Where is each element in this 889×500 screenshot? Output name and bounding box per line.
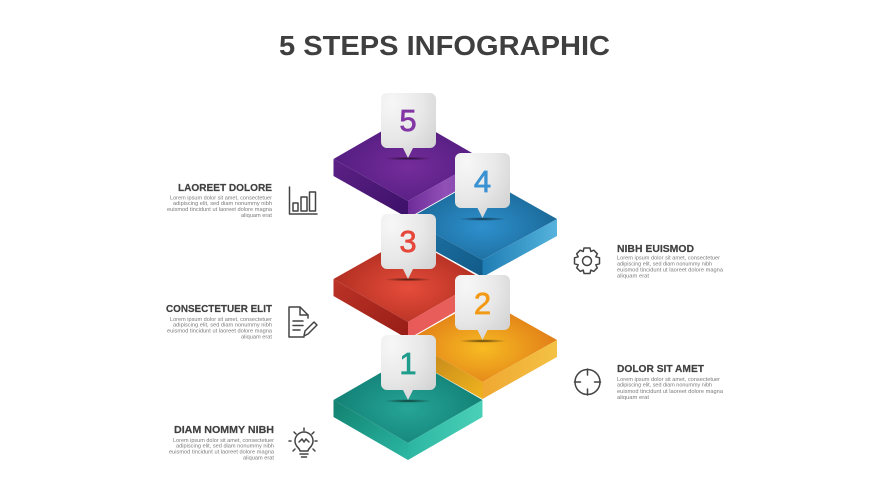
callout 1 [381, 335, 436, 403]
text block: Laoreet Dolore: LAOREET DOLORE [178, 182, 272, 194]
step 2 block: orange [408, 298, 557, 399]
step 3 block: red [334, 237, 482, 339]
callout 5: 5 [399, 103, 417, 138]
step 4 block: blue [408, 177, 557, 277]
text block: Dolor Sit Amet: DOLOR SIT AMET [617, 363, 705, 375]
icon: gear [574, 248, 600, 274]
callout 3: 3 [399, 224, 417, 259]
text block: Laoreet Dolore: adipiscing elit, sed diam nonummy nibh [173, 201, 272, 207]
step 1 block: teal [334, 357, 482, 460]
callout 2: 2 [474, 286, 491, 321]
text block: Consectetuer Elit: CONSECTETUER ELIT [166, 303, 273, 315]
text block: Nibh Euismod: Lorem ipsum dolor sit amet, consectetuer [617, 256, 720, 262]
text block: Nibh Euismod: euismod tincidunt ut laoreet dolore magna [617, 267, 723, 273]
text block: Nibh Euismod [617, 243, 723, 280]
text block: Dolor Sit Amet: Lorem ipsum dolor sit amet, consectetuer [617, 377, 720, 383]
text block: Diam Nommy Nibh: Lorem ipsum dolor sit amet, consectetuer [173, 438, 274, 444]
callout 3 [381, 214, 436, 281]
text block: Consectetuer Elit: euismod tincidunt ut laoreet dolore magna [167, 328, 272, 334]
text block: Diam Nommy Nibh: euismod tincidunt ut laoreet dolore magna [169, 449, 274, 455]
text block: Dolor Sit Amet: adipiscing elit, sed diam nonummy nibh [617, 383, 712, 389]
callout 4: 4 [474, 164, 491, 199]
text block: Dolor Sit Amet [617, 363, 723, 401]
text block: Consectetuer Elit: adipiscing elit, sed diam nonummy nibh [173, 322, 272, 328]
icon: light bulb [289, 428, 317, 457]
text block: Nibh Euismod: aliquam erat [617, 274, 650, 280]
callout 2 [455, 275, 510, 343]
text block: Diam Nommy Nibh: DIAM NOMMY NIBH [174, 424, 274, 436]
text block: Laoreet Dolore [167, 182, 273, 219]
text block: Diam Nommy Nibh: adipiscing elit, sed diam nonummy nibh [176, 444, 274, 450]
text block: Diam Nommy Nibh [169, 424, 275, 461]
callout 4 [455, 153, 510, 221]
text block: Laoreet Dolore: Lorem ipsum dolor sit amet, consectetuer [170, 196, 272, 202]
icon: bar chart [290, 187, 317, 214]
text block: Dolor Sit Amet: aliquam erat [617, 395, 650, 401]
text block: Nibh Euismod: adipiscing elit, sed diam nonummy nibh [617, 262, 712, 268]
text block: Laoreet Dolore: euismod tincidunt ut laoreet dolore magna [167, 207, 272, 213]
callout 1: 1 [399, 346, 417, 381]
step 5 block: purple [334, 116, 482, 218]
text block: Diam Nommy Nibh: aliquam erat [243, 455, 275, 461]
icon: target [574, 369, 600, 395]
text block: Dolor Sit Amet: euismod tincidunt ut laoreet dolore magna [617, 389, 723, 395]
text block: Consectetuer Elit: aliquam erat [241, 334, 273, 340]
text block: Consectetuer Elit [166, 303, 273, 340]
callout 5 [381, 93, 436, 160]
text block: Laoreet Dolore: aliquam erat [241, 213, 273, 219]
text block: Nibh Euismod: NIBH EUISMOD [617, 243, 694, 255]
title: 5 STEPS INFOGRAPHIC [279, 30, 610, 61]
icon: document and pencil [289, 307, 317, 337]
text block: Consectetuer Elit: Lorem ipsum dolor sit amet, consectetuer [170, 317, 272, 323]
